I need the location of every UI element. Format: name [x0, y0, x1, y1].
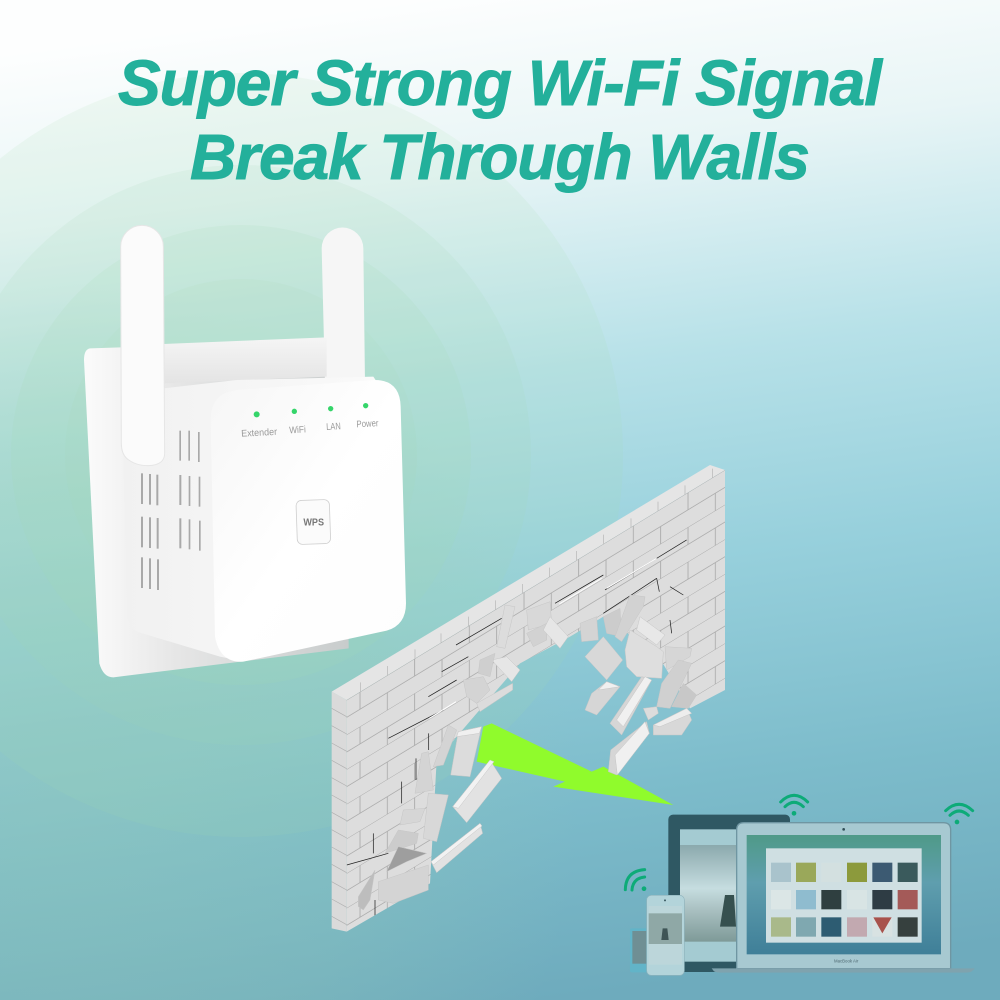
wifi icon: top center [781, 795, 808, 816]
status indicators: Power [356, 418, 379, 430]
wall top cap [332, 465, 725, 702]
wall cracks [347, 540, 687, 917]
router plugged into wall socket [84, 225, 406, 677]
tablet [668, 815, 790, 972]
laptop [712, 823, 975, 973]
green signal arrow [477, 723, 673, 805]
status indicators: WiFi [289, 424, 306, 436]
title [118, 47, 883, 193]
music window [766, 848, 922, 943]
phone [647, 895, 684, 975]
router front panel [211, 380, 406, 662]
WPS button: WPS [303, 518, 324, 529]
lower left teal tint [0, 280, 580, 1000]
wifi icon: top right [946, 804, 973, 824]
left antenna [121, 225, 165, 466]
router side body [123, 377, 380, 660]
status indicators: Extender [241, 427, 278, 440]
wall front face with hole [347, 470, 725, 932]
broken brick wall [332, 465, 725, 932]
connected devices [625, 795, 975, 975]
status indicators [241, 403, 379, 440]
status indicators: LAN [326, 421, 341, 433]
flying brick debris [358, 595, 697, 910]
side vents [141, 431, 201, 590]
right antenna [322, 227, 365, 383]
WPS button [296, 499, 331, 545]
small music player [630, 928, 647, 972]
title: Break Through Walls [190, 121, 810, 193]
album grid [771, 863, 918, 937]
wifi icon: left [625, 870, 646, 891]
wall end face [332, 692, 347, 932]
laptop: MacBook Air [834, 958, 859, 963]
title: Super Strong Wi-Fi Signal [118, 47, 883, 119]
signal rings [0, 73, 623, 837]
antenna bridge [163, 337, 327, 383]
wall socket plate [84, 340, 349, 677]
